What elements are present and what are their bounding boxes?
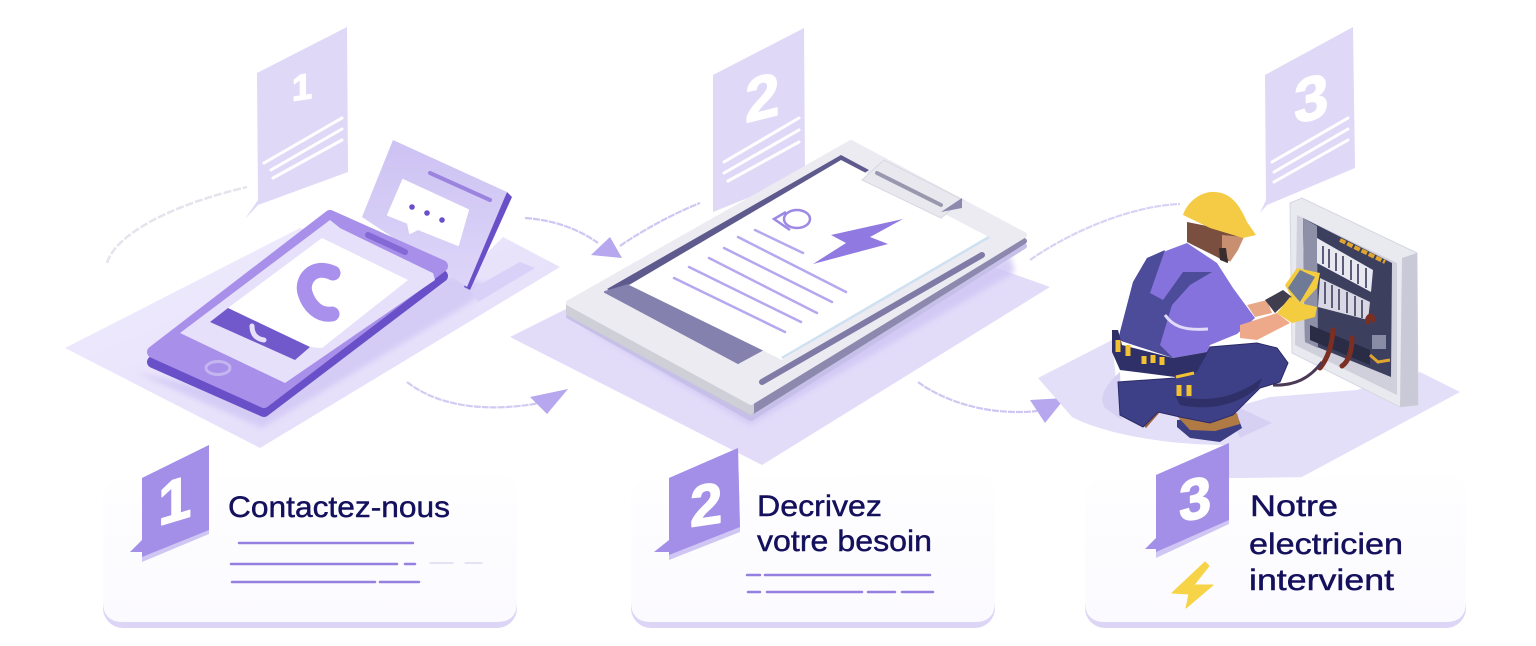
worker bbox=[1112, 192, 1320, 442]
chat card bbox=[362, 140, 512, 290]
tablet bbox=[569, 143, 1024, 418]
text lines bbox=[674, 230, 846, 332]
note card 3: 3 bbox=[1294, 60, 1328, 138]
slot bbox=[762, 255, 982, 382]
heading: Decrivez bbox=[757, 490, 882, 523]
note card 1: 1 bbox=[292, 65, 312, 109]
bolt icon bbox=[1172, 562, 1213, 608]
handset icon bbox=[304, 270, 333, 314]
belt bbox=[1112, 330, 1207, 377]
badge 3: 3 bbox=[1179, 464, 1211, 535]
breaker rows bbox=[1317, 238, 1373, 292]
heading: votre besoin bbox=[757, 525, 932, 558]
phone screen bbox=[180, 220, 435, 383]
step 1 illustration: phone bbox=[65, 27, 560, 448]
heading bbox=[1249, 490, 1403, 597]
arms bbox=[1247, 300, 1272, 317]
reflective strip bbox=[1165, 315, 1208, 329]
cables bbox=[1320, 316, 1373, 368]
arrow: step 1 to step 2 bbox=[407, 382, 568, 414]
call bar bbox=[210, 308, 310, 360]
clip bbox=[862, 160, 963, 218]
front boot bbox=[1177, 415, 1242, 442]
shirt bbox=[1120, 243, 1255, 358]
trouser shadow bbox=[1175, 378, 1262, 407]
test cable bbox=[1273, 362, 1322, 385]
dashed arc left bbox=[107, 187, 247, 263]
heading: Notre bbox=[1250, 490, 1338, 523]
hard hat bbox=[1183, 192, 1256, 238]
trousers bbox=[1118, 343, 1288, 427]
platform 1 bbox=[65, 228, 560, 448]
heading bbox=[757, 490, 932, 558]
arrow: into tablet bbox=[525, 203, 700, 258]
step card 3 bbox=[1085, 443, 1466, 628]
note card 2 bbox=[713, 28, 805, 212]
note card 1 bbox=[245, 27, 348, 219]
badge 3 bbox=[1145, 443, 1229, 558]
step 2 illustration: tablet bbox=[510, 28, 1050, 465]
multimeter and glove bbox=[1285, 268, 1320, 303]
text lines bbox=[231, 543, 482, 582]
step card 1 bbox=[103, 445, 517, 628]
text lines bbox=[747, 575, 933, 592]
electrical panel bbox=[1290, 198, 1418, 407]
heading: intervient bbox=[1249, 564, 1395, 597]
badge 1: 1 bbox=[158, 461, 191, 539]
step 3 illustration: electrician bbox=[1038, 27, 1460, 478]
platform 2 bbox=[510, 262, 1050, 465]
badge 2: 2 bbox=[690, 470, 722, 540]
screen frame bbox=[607, 155, 869, 363]
home button bbox=[206, 362, 230, 374]
badge 2 bbox=[654, 448, 740, 560]
neck and head bbox=[1187, 222, 1243, 263]
paper bbox=[629, 160, 989, 360]
bolt icon bbox=[813, 219, 903, 264]
note card 3 bbox=[1260, 27, 1355, 213]
logo ring bbox=[774, 210, 810, 230]
phone shadow bbox=[135, 275, 490, 428]
overalls bbox=[1118, 250, 1212, 358]
heading: Contactez-nous bbox=[228, 491, 450, 524]
phone bbox=[153, 216, 442, 411]
platform 3 bbox=[1038, 340, 1460, 478]
tablet shadow bbox=[580, 255, 1015, 425]
back boot bbox=[1140, 403, 1160, 428]
dark breakers bbox=[1310, 325, 1370, 365]
arrow: tablet to worker bbox=[1030, 204, 1180, 260]
note card 2: 2 bbox=[745, 59, 779, 137]
step card 2 bbox=[631, 448, 995, 628]
badge 1 bbox=[130, 445, 209, 562]
speech bubble bbox=[388, 180, 468, 245]
floor shadows bbox=[1102, 372, 1272, 438]
heading: electricien bbox=[1249, 528, 1403, 561]
arrow: step 2 to step 3 bbox=[918, 382, 1065, 423]
